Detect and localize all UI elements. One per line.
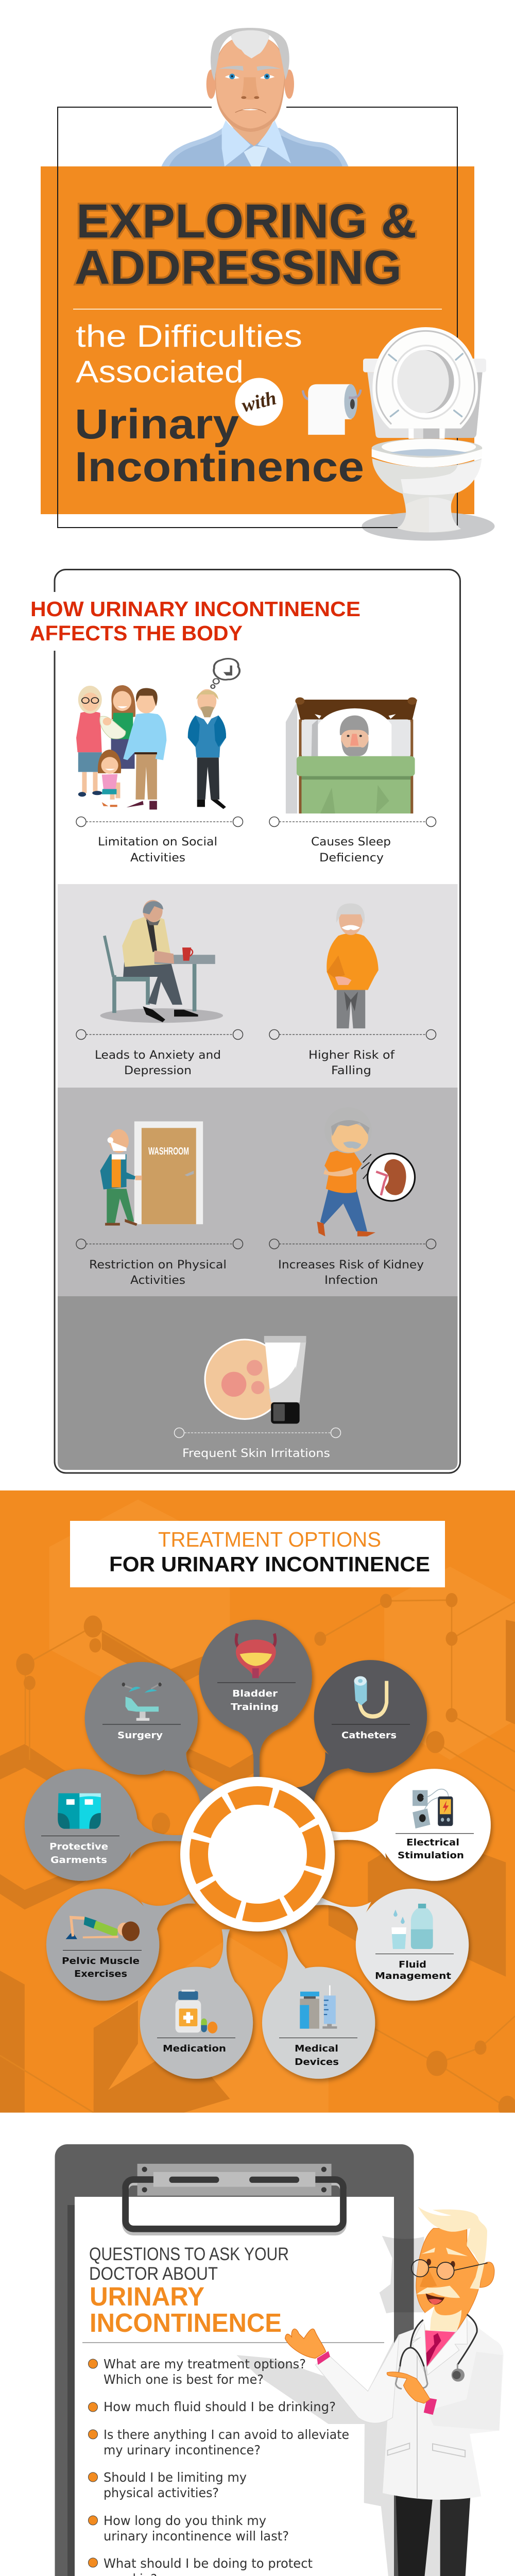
petal: bladder training (199, 1620, 312, 1785)
label: Higher Risk of (308, 1049, 395, 1062)
item: restriction on physical activities (76, 1122, 243, 1287)
item: leads to anxiety and depression (76, 900, 243, 1077)
question 5: urinary incontinence will last? (104, 2529, 289, 2544)
question 1 (89, 2357, 306, 2387)
heading (89, 2244, 289, 2337)
label: Infection (324, 1274, 378, 1287)
question 3 (89, 2427, 349, 2458)
petal: medication: Medication (163, 2043, 226, 2054)
question 4: Should I be limiting my (104, 2470, 247, 2485)
icon: person doing pelvic exercise (66, 1917, 140, 1941)
icon: toilet paper (303, 384, 360, 435)
subtitle: the difficulties associated (76, 319, 302, 389)
title: exploring and addressing: EXPLORING & (76, 194, 417, 248)
item: increases risk of kidney infection (269, 1107, 436, 1287)
heading: INCONTINENCE (90, 2308, 282, 2337)
petal: pelvic muscle exercises: Exercises (74, 1969, 127, 1979)
band: row four background (58, 1296, 457, 1470)
item: limitation on social activities (76, 658, 243, 865)
petal: protective garments: Garments (50, 1855, 107, 1866)
connector (269, 1029, 436, 1040)
label: Leads to Anxiety and (95, 1049, 221, 1062)
petal: electrical stimulation: Electrical (406, 1837, 459, 1848)
label: Limitation on Social (98, 836, 217, 849)
heading: DOCTOR ABOUT (89, 2264, 218, 2284)
title box (70, 1521, 445, 1587)
badge: with: with (239, 387, 279, 417)
item: higher risk of falling (269, 903, 436, 1077)
clipboard (55, 2144, 414, 2576)
title: exploring and addressing: ADDRESSING (75, 241, 402, 294)
label (95, 1049, 221, 1077)
question 3: my urinary incontinence? (104, 2443, 261, 2458)
petal: electrical stimulation (330, 1769, 491, 1881)
toilet shadow (362, 512, 494, 541)
item: frequent skin irritations (174, 1336, 341, 1460)
petal: medication (140, 1929, 253, 2079)
question 5 (89, 2513, 289, 2544)
heading (30, 597, 360, 645)
panel: how urinary incontinence affects the body (30, 570, 460, 1473)
petal: pelvic muscle exercises (46, 1889, 195, 2001)
badge: with (235, 378, 283, 426)
label: Depression (124, 1064, 192, 1077)
clip (126, 2164, 344, 2232)
connector (269, 1239, 436, 1249)
petal: catheters (296, 1660, 427, 1803)
icon: water bottle and glass (391, 1904, 433, 1949)
orange hexagon background (0, 1490, 515, 2118)
question 3: Is there anything I can avoid to alleviate (104, 2427, 349, 2442)
illustration: man at washroom door (100, 1122, 203, 1226)
heading: URINARY (90, 2282, 204, 2311)
band: row three background (58, 1088, 457, 1296)
question 6 (89, 2556, 313, 2576)
illustration: doctor (236, 2207, 504, 2576)
petal: medical devices: Devices (295, 2057, 339, 2067)
label (98, 836, 217, 865)
question list (89, 2357, 349, 2576)
label (308, 1049, 395, 1077)
illustration: man holding side with kidney (317, 1107, 415, 1236)
title box: TREATMENT OPTIONS (158, 1528, 381, 1551)
title: urinary incontinence (75, 401, 364, 490)
question 1: Which one is best for me? (104, 2372, 264, 2387)
label (278, 1259, 424, 1287)
illustration: depressed man at table (100, 900, 223, 1023)
illustration: family and isolated man (76, 658, 239, 809)
orange title panel (41, 166, 474, 514)
label: Falling (331, 1064, 371, 1077)
section: questions to ask your doctor (55, 2144, 504, 2576)
petal: fluid management: Management (375, 1971, 451, 1981)
item: causes sleep deficiency (269, 697, 436, 865)
illustration: irritated skin and cream tube (205, 1336, 306, 1423)
petal: fluid management (314, 1889, 469, 2001)
illustration: man with wet trousers (327, 903, 379, 1028)
petal: medical devices (262, 1929, 375, 2079)
heading: QUESTIONS TO ASK YOUR (89, 2244, 289, 2264)
subtitle: the difficulties associated: the Difficulties (76, 319, 302, 353)
label: Deficiency (319, 852, 384, 865)
petal: surgery (85, 1662, 214, 1803)
petal: bladder training: Bladder (232, 1688, 278, 1699)
icon: bladder (236, 1634, 276, 1678)
petal: fluid management: Fluid (399, 1959, 426, 1970)
connector (76, 1029, 243, 1040)
heading: HOW URINARY INCONTINENCE (30, 597, 360, 621)
label: Increases Risk of Kidney (278, 1259, 424, 1272)
text: washroom sign: WASHROOM (148, 1146, 189, 1157)
connector (174, 1428, 341, 1437)
label (89, 1259, 227, 1287)
petal: electrical stimulation: Stimulation (398, 1850, 464, 1861)
connector (76, 817, 243, 826)
question 6: What should I be doing to protect (104, 2556, 313, 2571)
question 4: physical activities? (104, 2485, 219, 2500)
icon: toilet (363, 327, 486, 532)
title: urinary incontinence: Urinary (75, 401, 239, 448)
thin black frame (58, 107, 457, 528)
illustration: elderly man (161, 28, 349, 166)
petal: medical devices: Medical (295, 2043, 338, 2054)
title: exploring and addressing (75, 194, 417, 294)
label: Restriction on Physical (89, 1259, 227, 1272)
section: treatment options (0, 1490, 515, 2118)
icon: pill bottle (176, 1990, 217, 2033)
heading: AFFECTS THE BODY (30, 621, 243, 645)
header section (41, 28, 494, 540)
label: Activities (130, 1274, 185, 1287)
title box: FOR URINARY INCONTINENCE (109, 1552, 430, 1576)
title: urinary incontinence: Incontinence (75, 444, 364, 490)
petal: bladder training: Training (231, 1702, 279, 1713)
panel outline (55, 570, 460, 1473)
subtitle: the difficulties associated: Associated (76, 354, 244, 389)
icon: vial and syringe (300, 1985, 337, 2029)
icon: diaper (58, 1793, 101, 1829)
question 5: How long do you think my (104, 2513, 266, 2528)
icon: catheter (354, 1676, 387, 1717)
band: row two background (58, 884, 457, 1088)
icon: operating table (122, 1683, 162, 1721)
petal: catheters: Catheters (341, 1730, 397, 1741)
label (311, 836, 391, 865)
petal: protective garments (25, 1769, 185, 1881)
label: Frequent Skin Irritations (182, 1447, 330, 1460)
question 4 (89, 2470, 247, 2500)
petal: surgery: Surgery (117, 1730, 163, 1741)
petal: protective garments: Protective (49, 1841, 108, 1852)
connector (269, 817, 436, 826)
petal: pelvic muscle exercises: Pelvic Muscle (62, 1956, 140, 1967)
doctor head and torso detail (387, 2207, 494, 2403)
question 2: How much fluid should I be drinking? (104, 2399, 336, 2414)
question 1: What are my treatment options? (104, 2357, 306, 2371)
central hub (180, 1777, 335, 1931)
icon: electrical stimulation device (413, 1789, 453, 1828)
connector (76, 1239, 243, 1249)
illustration: man in bed (286, 697, 417, 814)
label: Causes Sleep (311, 836, 391, 849)
label: Activities (130, 852, 185, 865)
